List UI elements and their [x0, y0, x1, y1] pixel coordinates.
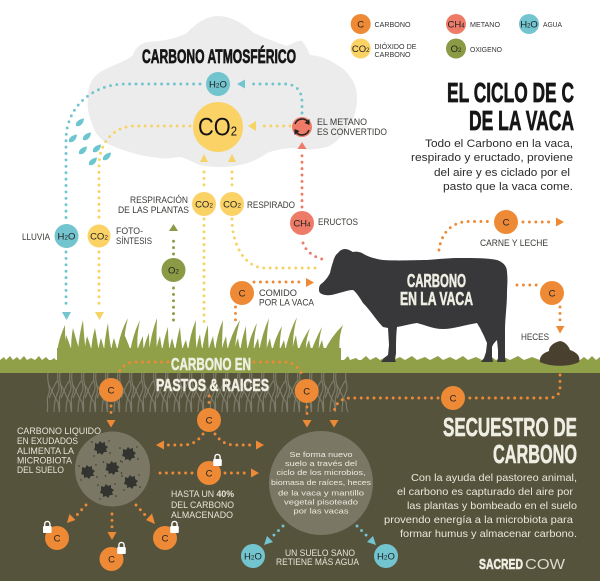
sequestration text: el carbono es capturado del aire por — [397, 486, 574, 498]
new soil circle — [269, 431, 373, 535]
healthy soil text: RETIENE MÁS AGUA — [276, 557, 359, 567]
manure carbon: C — [549, 288, 556, 300]
water output left: H2O — [244, 552, 262, 562]
intro text — [411, 138, 573, 193]
green ground band — [0, 360, 600, 373]
water output right — [357, 526, 398, 568]
exudates text: ALIMENTA LA — [17, 446, 74, 456]
atmosphere water: H2O — [209, 80, 227, 90]
legend: CO2 — [352, 44, 370, 55]
new soil circle: suelo a través del — [285, 459, 357, 468]
belching methane: CH4 — [293, 218, 311, 230]
microbe circle — [75, 432, 150, 506]
locked carbon right: C — [162, 534, 169, 544]
locked carbon left: C — [54, 534, 61, 544]
new soil circle: Se forma nuevo — [290, 450, 352, 459]
stored percentage text: ALMACENADO — [171, 510, 233, 520]
sequestration heading — [443, 412, 577, 469]
sequestration text: las plantas y bombeado en el suelo — [407, 500, 577, 512]
oxygen: O2 — [168, 266, 179, 276]
cloud — [88, 16, 357, 167]
cloud title: CARBONO ATMOSFÉRICO — [142, 46, 296, 68]
atmosphere water — [206, 72, 230, 96]
central carbon with branches: C — [206, 416, 213, 426]
locked carbon left — [43, 521, 69, 550]
grass and roots heading: CARBONO EN — [171, 354, 251, 374]
grass dotted branches — [118, 362, 303, 405]
legend: O2 — [451, 44, 462, 55]
photosynthesis carbon dioxide — [88, 224, 152, 248]
manure pile — [540, 341, 579, 366]
respired carbon dioxide: RESPIRADO — [247, 200, 295, 210]
stored percentage text: HASTA UN 40% — [171, 489, 234, 499]
respired carbon dioxide: CO2 — [223, 200, 241, 210]
soil — [0, 372, 600, 581]
water output right: H2O — [377, 552, 395, 562]
plant respiration carbon dioxide: DE LAS PLANTAS — [118, 205, 189, 215]
sequestration text: Con la ayuda del pastoreo animal, — [411, 472, 577, 484]
legend: AGUA — [543, 20, 562, 29]
eaten by cow carbon: POR LA VACA — [259, 298, 314, 308]
eaten by cow carbon: COMIDO — [259, 288, 297, 298]
grass and roots heading: PASTOS & RAICES — [156, 375, 269, 395]
exudates text: DEL SUELO — [17, 465, 64, 475]
locked carbon center: C — [108, 554, 115, 566]
water cycle dotted path — [62, 80, 302, 320]
rain water — [22, 224, 78, 248]
eaten by cow carbon — [230, 278, 314, 322]
healthy soil text — [276, 548, 359, 567]
carbon in left roots — [99, 378, 123, 428]
intro text: respirado y eructado, proviene — [411, 152, 573, 164]
locked carbon center — [100, 542, 126, 571]
sequestration dotted path — [330, 375, 560, 428]
eaten by cow carbon: C — [239, 288, 246, 300]
carbon in right roots — [295, 379, 319, 428]
exudates text — [17, 426, 101, 475]
meat and milk carbon: CARNE Y LECHE — [480, 238, 548, 248]
rain water: LLUVIA — [22, 232, 50, 242]
stored carbon with lock: C — [206, 468, 213, 480]
plant respiration carbon dioxide: CO2 — [195, 200, 213, 210]
exudates text: CARBONO LIQUIDO — [17, 426, 101, 436]
cow label — [400, 271, 473, 309]
new soil circle: por las vacas — [294, 506, 349, 516]
carbon dioxide dotted paths — [95, 121, 316, 322]
meat and milk carbon: C — [503, 218, 510, 228]
central carbon with branches — [156, 408, 264, 450]
legend: H2O — [520, 20, 538, 30]
stored percentage text: DEL CARBONO — [171, 500, 234, 510]
cow label: EN LA VACA — [400, 289, 473, 309]
logo: COW — [525, 556, 566, 573]
carbon in left roots: C — [108, 386, 115, 396]
plant respiration carbon dioxide: RESPIRACIÓN — [130, 195, 188, 205]
photosynthesis carbon dioxide: CO2 — [90, 232, 108, 242]
intro text: pasto que la vaca come. — [443, 181, 573, 193]
tall grass — [57, 317, 343, 363]
exudates text: EN EXUDADOS — [17, 436, 78, 446]
large carbon dioxide — [193, 102, 243, 152]
methane label — [317, 117, 387, 137]
sequestration text: provendo energía a la microbiota para — [384, 514, 573, 526]
legend: CARBONO — [374, 20, 411, 29]
sequestration text: formar humus y almacenar carbono. — [400, 528, 577, 540]
rain water: H2O — [58, 232, 75, 242]
plant respiration carbon dioxide — [118, 192, 216, 216]
exudates text: MICROBIOTA — [17, 456, 72, 466]
methane dotted path — [298, 142, 326, 260]
oxygen — [162, 258, 186, 282]
legend — [351, 14, 562, 59]
belching methane — [290, 211, 358, 235]
microbe output arrows — [67, 505, 155, 540]
legend: DIÓXIDO DE — [374, 42, 416, 51]
carbon in right roots: C — [303, 386, 310, 398]
new soil circle: vegetal pisoteado — [284, 498, 358, 506]
methane label: ES CONVERTIDO — [317, 127, 387, 137]
stored carbon with lock — [160, 454, 259, 485]
new soil circle: de la vaca y mantillo — [278, 488, 364, 498]
intro text: Todo el Carbono en la vaca, — [425, 138, 573, 150]
healthy soil text: UN SUELO SANO — [285, 548, 355, 558]
legend: METANO — [470, 20, 500, 29]
legend: CARBONO — [374, 50, 411, 59]
manure carbon: HECES — [521, 332, 549, 342]
grass and roots heading — [156, 354, 269, 395]
legend: C — [357, 20, 364, 30]
logo: SACRED — [479, 556, 523, 573]
cow silhouette — [319, 249, 507, 362]
roots — [47, 373, 348, 412]
cow label: CARBONO — [407, 271, 466, 291]
methane label: EL METANO — [317, 117, 367, 127]
main title — [447, 77, 574, 136]
sequestration carbon: C — [450, 394, 457, 404]
locked carbon right — [153, 521, 179, 550]
new soil circle: biomasa de raíces, heces — [271, 478, 371, 487]
meat and milk carbon — [439, 210, 564, 250]
water output left — [241, 526, 283, 568]
methane conversion icon — [292, 117, 312, 137]
legend: OXIGENO — [470, 45, 502, 54]
respired carbon dioxide — [220, 192, 295, 216]
photosynthesis carbon dioxide: SÍNTESIS — [116, 236, 152, 246]
sequestration carbon — [441, 386, 465, 410]
legend: CH4 — [447, 20, 465, 30]
sequestration text — [384, 472, 577, 540]
intro text: del aire y es ciclado por el — [434, 167, 570, 179]
low grass left and right — [0, 356, 600, 366]
large carbon dioxide: CO2 — [198, 114, 237, 142]
manure carbon — [517, 281, 564, 342]
rain drops — [69, 118, 111, 165]
stored percentage text — [171, 489, 234, 520]
belching methane: ERUCTOS — [318, 217, 358, 227]
new soil circle: ciclo de los microbios, — [276, 468, 366, 477]
oxygen dotted path — [169, 224, 178, 322]
photosynthesis carbon dioxide: FOTO- — [116, 226, 143, 236]
